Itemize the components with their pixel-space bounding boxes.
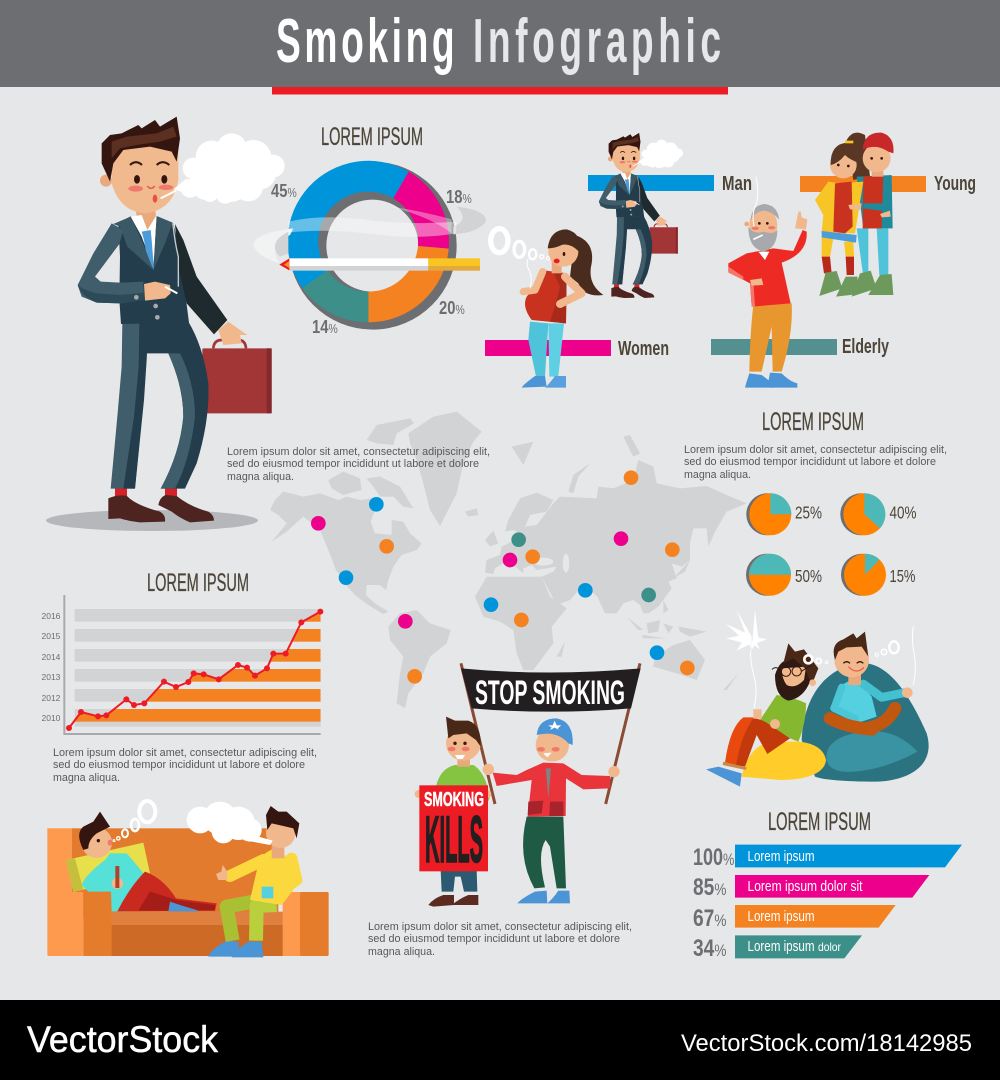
chart year labels	[42, 611, 61, 723]
donut chart with cigarette	[253, 161, 486, 330]
line chart	[64, 595, 323, 734]
bar percentages: 100%	[693, 845, 734, 871]
category bars	[485, 175, 926, 356]
pie 50%	[746, 554, 822, 596]
text block: under donut	[227, 446, 490, 483]
pie 15%: 15%	[890, 567, 915, 587]
chart year labels: 2014	[42, 652, 61, 662]
yellow beanbag	[742, 741, 826, 780]
bar percentages: 34%	[693, 934, 727, 962]
text block: chart	[53, 747, 317, 784]
heading: pies: LOREM IPSUM	[762, 408, 864, 436]
heading: horizontal bars: LOREM IPSUM	[768, 808, 871, 836]
chart year labels: 2013	[42, 672, 61, 682]
title: Smoking	[276, 6, 458, 75]
bearded man	[706, 643, 828, 787]
pie 40%: 40%	[890, 504, 916, 523]
pie 25%	[746, 493, 822, 535]
man in blue	[830, 626, 915, 729]
reclining man	[66, 801, 217, 911]
category labels	[618, 173, 976, 360]
protester with sign	[415, 717, 491, 907]
protester with cap	[483, 718, 620, 903]
text block: protest: Lorem ipsum dolor sit amet, consectetur adipiscing elit,	[368, 921, 632, 933]
heading: line chart: LOREM IPSUM	[147, 569, 249, 597]
pie 25%: 25%	[795, 504, 822, 523]
category labels: Young	[934, 173, 976, 195]
map markers	[311, 470, 695, 684]
category labels: Women	[618, 338, 669, 360]
seated man	[187, 802, 299, 957]
text block: under donut: sed do eiusmod tempor incididunt ut labore et dolore	[227, 458, 479, 470]
text block: under donut: magna aliqua.	[227, 471, 294, 483]
pie 15%	[841, 554, 915, 596]
sign text	[424, 789, 484, 876]
text block: pies: Lorem ipsum dolor sit amet, consectetur adipiscing elit,	[684, 444, 947, 456]
bar labels: Lorem ipsum	[748, 908, 814, 925]
teal beanbag	[802, 663, 929, 782]
bar labels: dolor	[818, 940, 841, 954]
text block: protest: sed do eiusmod tempor incididunt ut labore et dolore	[368, 933, 620, 945]
small man figure	[599, 133, 683, 298]
category labels: Man	[722, 173, 752, 195]
text block: pies	[684, 444, 947, 481]
young couple figure	[815, 133, 894, 297]
header band	[0, 0, 1000, 94]
donut percentage labels: 14%	[312, 316, 338, 337]
woman figure	[491, 229, 603, 388]
banner poles	[461, 663, 640, 804]
chart year labels: 2016	[42, 611, 61, 621]
text block: chart: Lorem ipsum dolor sit amet, consectetur adipiscing elit,	[53, 747, 317, 759]
chart year labels: 2015	[42, 631, 61, 641]
text block: pies: sed do eiusmod tempor incididunt ut labore et dolore	[684, 456, 936, 468]
bar percentages: 85%	[693, 873, 727, 901]
donut percentage labels	[271, 180, 472, 337]
businessman	[78, 117, 285, 522]
shadow under businessman	[46, 510, 258, 531]
heading: donut chart: LOREM IPSUM	[321, 123, 423, 151]
sign text: SMOKING	[424, 789, 484, 811]
sofa	[47, 828, 329, 956]
text block: chart: sed do eiusmod tempor incididunt ut labore et dolore	[53, 759, 305, 771]
category labels: Elderly	[842, 336, 890, 358]
sofa scene	[47, 801, 329, 957]
watermark footer: VectorStock	[27, 1019, 218, 1060]
bar labels	[748, 848, 863, 955]
pie 40%	[840, 493, 916, 535]
watermark footer	[0, 1000, 1000, 1080]
world map	[270, 412, 747, 708]
bar labels: Lorem ipsum	[748, 938, 814, 955]
donut percentage labels: 45%	[271, 180, 297, 201]
chart year labels: 2012	[42, 693, 61, 703]
protest scene	[415, 663, 641, 907]
donut percentage labels: 18%	[446, 186, 472, 207]
elderly figure	[728, 177, 807, 388]
watermark footer: VectorStock.com/18142985	[681, 1030, 972, 1057]
text: KILLS	[425, 802, 483, 876]
horizontal bar chart	[735, 845, 962, 958]
bar labels: Lorem ipsum	[748, 848, 814, 865]
title: Infographic	[473, 6, 726, 75]
text block: protest: magna aliqua.	[368, 946, 435, 958]
text block: pies: magna aliqua.	[684, 469, 751, 481]
beanbag scene	[706, 610, 929, 787]
banner	[461, 668, 641, 712]
leaf icon	[726, 610, 767, 651]
bar labels: Lorem ipsum dolor sit	[748, 878, 863, 895]
chart year labels: 2010	[42, 713, 61, 723]
bar percentages	[693, 845, 734, 962]
title	[276, 6, 726, 75]
text block: protest	[368, 921, 632, 958]
donut percentage labels: 20%	[439, 297, 465, 318]
bar percentages: 67%	[693, 904, 727, 932]
text block: chart: magna aliqua.	[53, 772, 120, 784]
banner text: STOP SMOKING	[475, 674, 625, 712]
text block: under donut: Lorem ipsum dolor sit amet, consectetur adipiscing elit,	[227, 446, 490, 458]
pie 50%: 50%	[795, 567, 822, 587]
